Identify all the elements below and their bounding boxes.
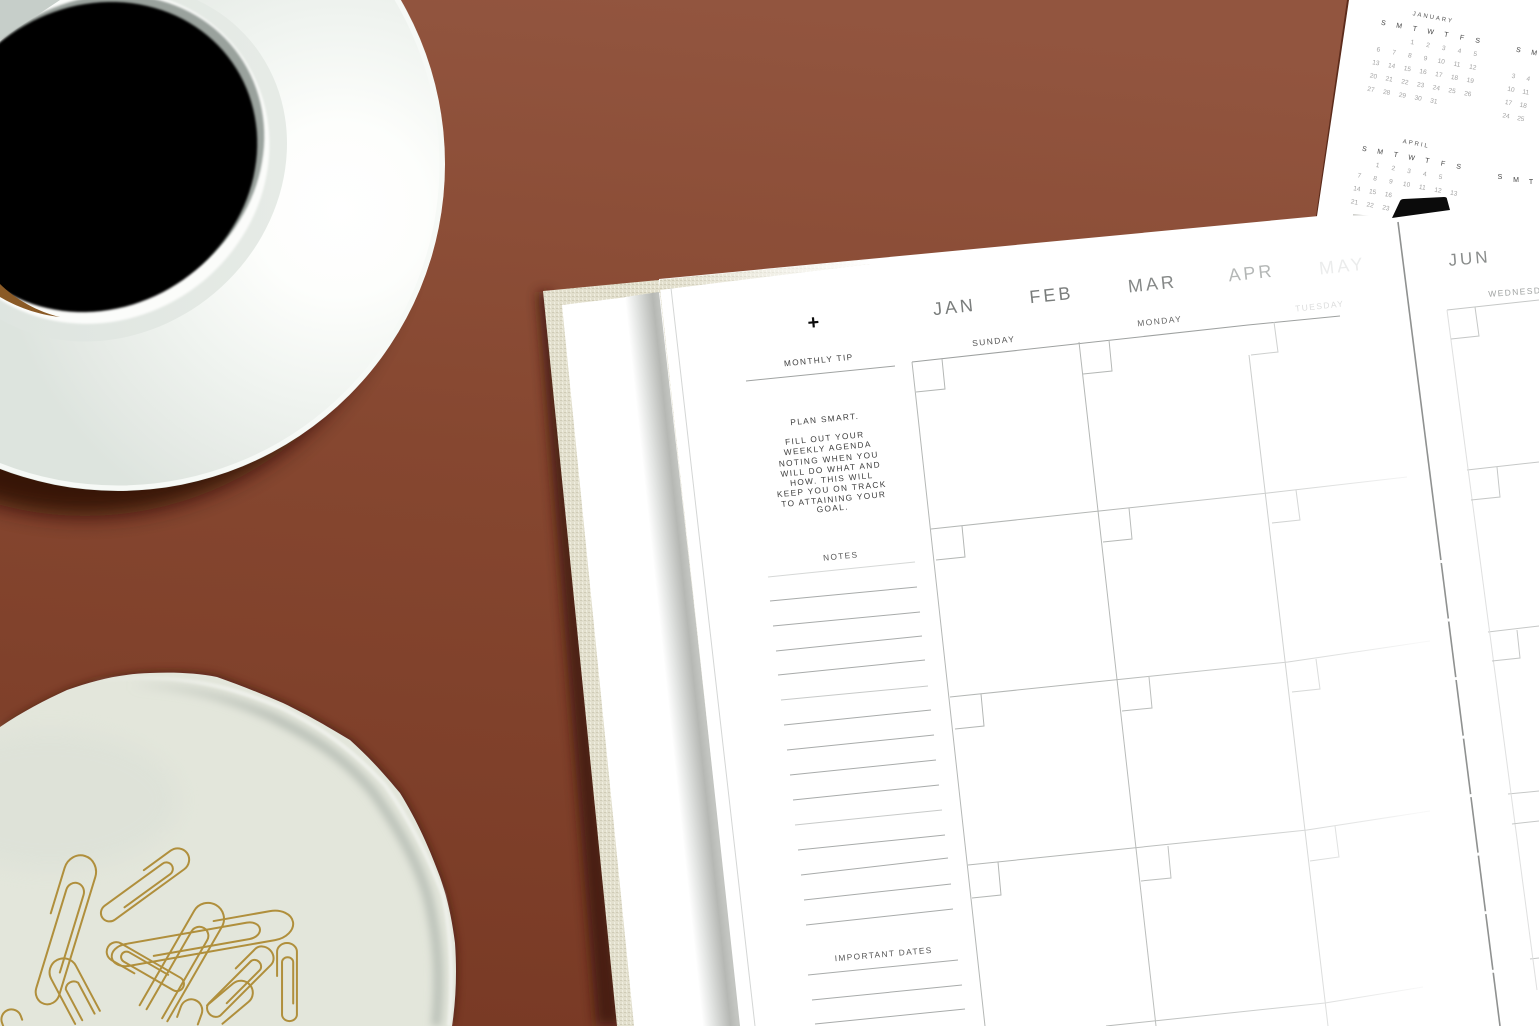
tip body text: PLAN SMART.	[790, 411, 860, 427]
calendar: april: APRIL	[1402, 139, 1430, 150]
calendar: february: 25	[1516, 115, 1525, 123]
calendar: january: 28	[1382, 89, 1391, 97]
calendar: april: 5	[1438, 174, 1443, 181]
calendar: january: 6	[1376, 46, 1381, 54]
calendar: january: 24	[1432, 84, 1441, 93]
plate with gold paper clips	[0, 671, 458, 1026]
cover shadow	[538, 292, 622, 1026]
calendar: january: 30	[1414, 95, 1423, 103]
calendar: april: 15	[1368, 188, 1377, 196]
tip body text: WEEKLY AGENDA	[783, 439, 872, 457]
calendar: january: 5	[1473, 51, 1478, 58]
calendar: february: 10	[1507, 86, 1515, 94]
calendar: april	[1350, 132, 1466, 224]
tip body text: WILL DO WHAT AND	[780, 459, 881, 479]
calendar: april: 22	[1366, 201, 1375, 210]
paper clips	[0, 844, 297, 1026]
calendar: april: 9	[1388, 178, 1394, 186]
calendar: april: 23	[1382, 204, 1390, 213]
calendar: february: 17	[1504, 99, 1513, 107]
cup wall	[0, 0, 360, 415]
date boxes	[916, 359, 945, 392]
weekday headers: SUNDAY	[972, 334, 1016, 348]
calendar: april: 2	[1391, 165, 1396, 173]
tip body text: NOTING WHEN YOU	[778, 449, 879, 469]
tip body text	[776, 411, 887, 515]
calendar: april: 4	[1422, 171, 1427, 178]
calendar: april: 12	[1434, 187, 1443, 195]
calendar: january: 20	[1369, 72, 1378, 81]
calendar grid	[912, 316, 1430, 1026]
calendar: january	[1367, 6, 1485, 112]
calendar: january: 16	[1419, 68, 1428, 76]
calendar: april: SMTWTFS	[1361, 146, 1462, 171]
note lines	[770, 587, 953, 925]
calendar: january: 2	[1426, 42, 1431, 49]
calendar: february: 11	[1522, 89, 1530, 97]
tip body text: HOW. THIS WILL	[790, 470, 874, 488]
calendar: january: 14	[1387, 62, 1396, 70]
cup inner wall	[0, 0, 325, 368]
calendar: april: 14	[1353, 185, 1361, 194]
calendar: january: 27	[1367, 86, 1375, 94]
plate rim shading	[120, 686, 438, 1026]
calendar: april: 21	[1350, 198, 1359, 207]
weekday headers: MONDAY	[1137, 314, 1183, 328]
calendar: february: 24	[1502, 112, 1511, 121]
calendar: january: 13	[1372, 59, 1380, 68]
plate lip highlight	[90, 678, 451, 1026]
calendar: april: 13	[1449, 190, 1458, 198]
calendar: january: 29	[1398, 92, 1407, 100]
inner cover	[562, 293, 740, 1026]
calendar: january: JANUARY	[1412, 11, 1454, 25]
calendar: january: 10	[1437, 58, 1446, 66]
planner cover	[538, 278, 741, 1026]
calendar: january: SMTWTFS	[1380, 20, 1481, 45]
calendar: april: 16	[1384, 191, 1393, 199]
calendar: april: 7	[1357, 172, 1362, 180]
month tabs	[932, 247, 1491, 319]
calendar: january: 12	[1468, 64, 1477, 72]
calendar: april: 11	[1418, 184, 1427, 192]
month tabs: MAR	[1127, 272, 1178, 297]
linen cover	[543, 278, 740, 1026]
month tabs: MAY	[1318, 254, 1367, 278]
month tabs: APR	[1227, 261, 1275, 285]
planner page	[659, 212, 1539, 1026]
calendar: january: 21	[1385, 75, 1394, 84]
calendar: january: 8	[1407, 52, 1413, 60]
tip body text: KEEP YOU ON TRACK	[776, 479, 887, 499]
sidebar: notes: NOTES	[823, 549, 859, 563]
calendar: april: 3	[1407, 168, 1412, 175]
weekday headers	[972, 285, 1539, 348]
calendar: january: 31	[1430, 98, 1438, 106]
calendar: january: 19	[1466, 77, 1475, 85]
calendar: january: 1	[1410, 39, 1415, 47]
linen top strip	[660, 260, 870, 290]
loose calendar sheet	[1316, 0, 1539, 240]
calendar: january: 25	[1448, 87, 1457, 95]
calendar: january: 22	[1401, 78, 1409, 87]
calendar: february	[1502, 46, 1538, 123]
tip body text: TO ATTAINING YOUR	[781, 489, 887, 509]
calendar: april: 10	[1402, 181, 1411, 189]
sidebar: monthly tip	[746, 352, 895, 515]
coffee edge	[0, 284, 60, 317]
sidebar: important dates: IMPORTANT DATES	[834, 945, 933, 963]
saucer with coffee cup	[0, 0, 445, 516]
coffee	[0, 0, 318, 375]
month tabs: FEB	[1028, 283, 1074, 307]
next page grid	[1447, 300, 1539, 990]
calendar: february: 3	[1511, 73, 1516, 80]
calendar: april: 8	[1373, 175, 1378, 183]
page fold with stitching	[1398, 222, 1500, 1026]
month tabs: JAN	[932, 295, 977, 319]
calendar: january: 9	[1423, 55, 1428, 63]
month tabs: JUN	[1448, 247, 1491, 270]
calendar: january: 18	[1450, 74, 1459, 82]
calendar: january: 26	[1464, 90, 1472, 98]
calendar: january: 17	[1435, 71, 1443, 79]
calendar: may header: SMT	[1498, 174, 1534, 186]
weekday headers: TUESDAY	[1295, 298, 1345, 314]
calendar: january: 11	[1453, 61, 1461, 69]
calendar: january: 4	[1457, 48, 1462, 55]
calendar: january: 7	[1392, 49, 1397, 57]
monthly tip heading: MONTHLY TIP	[784, 352, 854, 368]
plus icon: +	[807, 312, 820, 334]
calendar: february: SM	[1515, 47, 1538, 57]
calendar: february: 4	[1526, 76, 1531, 83]
sidebar: important dates	[808, 945, 965, 1024]
cup rim	[0, 0, 336, 392]
black ribbon bookmark	[1392, 197, 1450, 218]
page shadow	[625, 292, 741, 1026]
tip body text: GOAL.	[816, 501, 849, 515]
calendar: april: 1	[1375, 162, 1380, 170]
calendar: january: 15	[1403, 65, 1412, 73]
calendar: february: 18	[1519, 102, 1528, 110]
calendar: january: 3	[1441, 45, 1446, 52]
calendar: january: 23	[1416, 81, 1425, 90]
tip body text: FILL OUT YOUR	[785, 429, 865, 447]
sidebar: notes	[768, 549, 953, 925]
plate left tone	[0, 730, 180, 870]
